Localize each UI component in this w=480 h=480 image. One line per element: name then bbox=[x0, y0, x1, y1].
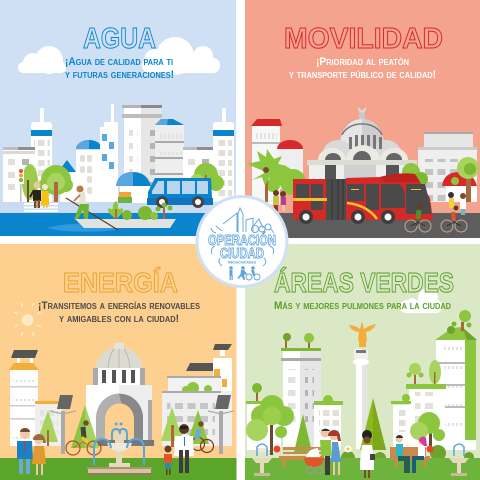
monument to the revolution bbox=[86, 343, 154, 446]
cyclist left: energia bbox=[66, 405, 101, 455]
badge title: OPERACIÓN bbox=[208, 231, 276, 249]
buildings left: movilidad bbox=[251, 119, 303, 205]
couple with stroller bbox=[304, 428, 341, 475]
badge title bbox=[208, 231, 276, 262]
market stall bbox=[116, 172, 151, 203]
subtitle: movilidad: ¡Prioridad al peatón bbox=[316, 56, 409, 68]
subtitle: agua: ¡Agua de calidad para ti bbox=[65, 56, 173, 68]
ground bbox=[245, 458, 480, 480]
panel: areas verdes bbox=[245, 244, 480, 480]
subtitle: movilidad bbox=[289, 58, 436, 78]
sidewalk and crosswalk bbox=[3, 202, 218, 212]
buildings right: movilidad bbox=[402, 132, 479, 209]
subtitle: areas verdes: Más y mejores pulmones para la ciudad bbox=[274, 300, 451, 312]
benches bbox=[279, 447, 430, 467]
badge small caption: MEGACIUDADES bbox=[228, 260, 256, 264]
boat with plants bbox=[75, 201, 176, 228]
trees: agua bbox=[22, 163, 224, 202]
center badge: operacion ciudad bbox=[197, 196, 287, 286]
man and child: energia bbox=[164, 424, 194, 475]
subtitle: agua bbox=[65, 58, 174, 78]
subtitle: movilidad: y transporte público de calidad! bbox=[289, 69, 436, 81]
badge icons: pedestrians and cyclist bbox=[229, 266, 260, 280]
pedestrians: movilidad bbox=[273, 190, 466, 215]
palace of fine arts bbox=[307, 107, 417, 181]
buildings left: energia bbox=[9, 350, 62, 446]
elderly couple bbox=[30, 182, 50, 208]
angel of independence column bbox=[349, 321, 376, 449]
seated couple bbox=[396, 435, 427, 473]
red articulated bus bbox=[293, 173, 433, 224]
skyline: agua bbox=[3, 104, 234, 205]
road bbox=[278, 213, 480, 238]
fountains bbox=[252, 444, 469, 476]
clouds bbox=[18, 37, 220, 75]
water bbox=[0, 213, 206, 236]
title: energia: ENERGÍA bbox=[63, 267, 178, 298]
panel: agua bbox=[0, 0, 236, 236]
panel: movilidad bbox=[245, 0, 480, 238]
title: movilidad: MOVILIDAD bbox=[284, 23, 443, 55]
couple: energia bbox=[17, 428, 46, 475]
cloud bbox=[400, 288, 442, 313]
fountain bbox=[87, 422, 152, 475]
trees right: energia bbox=[161, 407, 209, 447]
subtitle: energia: y amigables con la ciudad! bbox=[59, 313, 179, 325]
flowers bbox=[274, 446, 434, 452]
palm and tree bbox=[247, 149, 306, 202]
badge title: CIUDAD bbox=[220, 245, 264, 262]
traffic light bbox=[19, 169, 24, 202]
icon: sun bbox=[14, 303, 41, 336]
ground bbox=[0, 458, 237, 480]
cyclists: movilidad bbox=[405, 204, 467, 232]
cyclist right: energia bbox=[192, 421, 214, 452]
subtitle: agua: y futuras generaciones! bbox=[65, 69, 174, 81]
buildings: areas verdes bbox=[246, 333, 476, 450]
solar lamps bbox=[50, 395, 234, 454]
trees and hedges: areas verdes bbox=[246, 395, 474, 465]
bus bbox=[147, 178, 213, 208]
panel: energia bbox=[0, 244, 237, 480]
subtitle: energia: ¡Transitemos a energías renovables bbox=[38, 300, 201, 312]
buildings right: energia bbox=[162, 344, 232, 446]
woman in white bbox=[360, 430, 375, 478]
boatman bbox=[66, 186, 118, 230]
subtitle: energia bbox=[38, 302, 200, 322]
badge skyline icon bbox=[211, 208, 274, 266]
hilltop with tree bbox=[435, 310, 477, 340]
title: agua: AGUA bbox=[83, 23, 156, 55]
